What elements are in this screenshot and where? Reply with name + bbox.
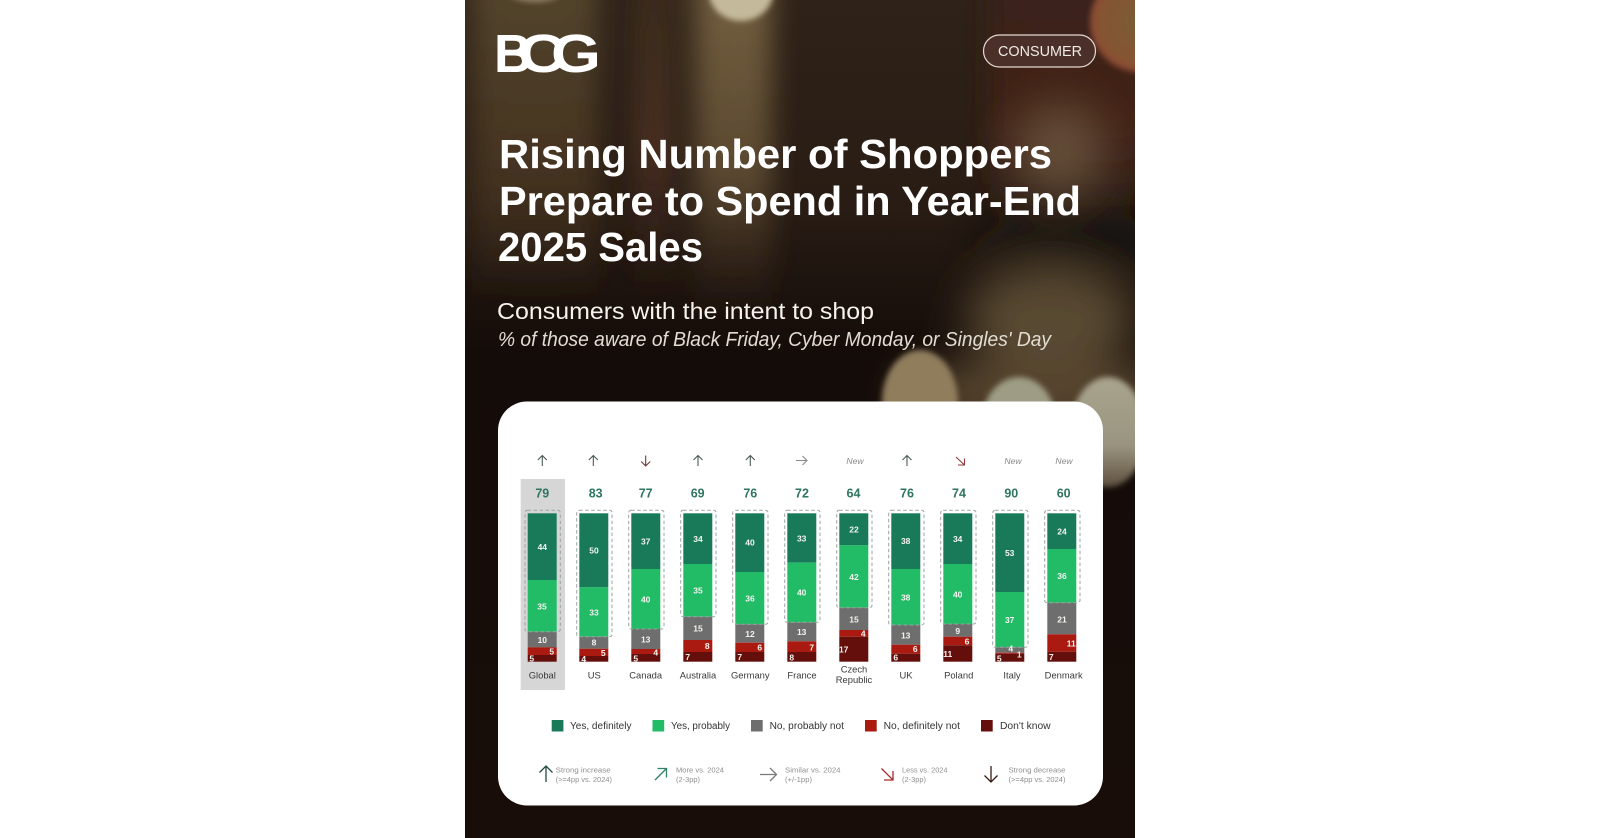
legend: trend arrows: Strong increase <box>556 766 611 774</box>
bar: Denmark <box>1045 510 1080 662</box>
bar: Australia <box>681 510 716 662</box>
subtitle: % of those aware of Black Friday, Cyber Monday, or Singles' Day <box>498 329 1052 351</box>
country labels: Canada <box>629 670 663 681</box>
bar: Denmark: 11 <box>1067 638 1076 648</box>
totals row: 76 <box>900 486 914 500</box>
bar: UK: 13 <box>901 630 911 640</box>
legend: answer colours: Yes, definitely <box>570 721 632 732</box>
bar: US: 50 <box>589 546 599 556</box>
bar: Czech Republic <box>837 510 872 662</box>
country labels: Poland <box>944 670 973 681</box>
totals row: 60 <box>1057 486 1071 500</box>
bar: France: 40 <box>797 588 807 598</box>
bar: France <box>785 510 820 662</box>
trend arrows row <box>538 456 964 466</box>
legend: trend arrows: (>=4pp vs. 2024) <box>556 775 612 784</box>
bar: Canada: 13 <box>641 634 651 644</box>
legend: trend arrows: (2-3pp) <box>676 775 700 784</box>
country labels: France <box>787 670 817 681</box>
highlight: global column <box>521 479 565 690</box>
bar: Czech Republic: 4 <box>861 629 866 639</box>
bar: Canada: 4 <box>653 647 658 657</box>
totals row: 90 <box>1004 486 1018 500</box>
legend: answer colours: No, probably not <box>770 721 844 732</box>
subtitle: Consumers with the intent to shop <box>497 298 874 324</box>
totals row: 76 <box>743 486 757 500</box>
bar: Poland <box>941 510 976 662</box>
legend: answer colours: Don't know <box>1000 721 1051 732</box>
"new" labels: New <box>1004 456 1022 466</box>
legend: trend arrows: More vs. 2024 <box>676 766 724 774</box>
bar: Poland: 9 <box>955 626 960 636</box>
country labels: Germany <box>731 670 770 681</box>
bar: Denmark: 24 <box>1057 526 1067 536</box>
country labels: Australia <box>680 670 717 681</box>
bar: US: 33 <box>589 608 599 618</box>
background photo: blurred bokeh lights <box>465 0 1135 838</box>
country labels: Czech <box>841 663 867 674</box>
legend: trend arrows: Similar vs. 2024 <box>785 766 840 774</box>
bar: Australia: 8 <box>705 641 710 651</box>
bar: Germany: 40 <box>745 538 755 548</box>
panel: chart card <box>498 402 1103 806</box>
legend: answer colours <box>552 720 1051 732</box>
country labels: UK <box>899 670 913 681</box>
logo: BCG <box>494 24 601 84</box>
bar: Czech Republic: 42 <box>849 572 859 582</box>
bar: France: 8 <box>789 652 794 662</box>
legend: trend arrows: (2-3pp) <box>902 775 926 784</box>
title <box>498 131 1081 270</box>
title: Rising Number of Shoppers <box>499 131 1052 177</box>
logo: BCG: B <box>494 24 532 84</box>
bar: Global: 35 <box>537 602 547 612</box>
country labels: Republic <box>836 674 873 685</box>
bar: Czech Republic: 22 <box>849 524 859 534</box>
bar: Global: 44 <box>538 542 547 552</box>
bar: US: 5 <box>601 648 606 658</box>
bar: Italy: 37 <box>1005 615 1015 625</box>
bar: France: 33 <box>797 533 807 543</box>
totals row: 72 <box>795 486 809 500</box>
totals row: 69 <box>691 486 705 500</box>
bar: Czech Republic: 17 <box>839 645 849 655</box>
bar: Global: 5 <box>549 646 554 656</box>
logo: BCG: C <box>518 24 566 84</box>
legend: trend arrows: Less vs. 2024 <box>902 766 948 774</box>
bar: Australia: 15 <box>693 623 703 633</box>
bar: UK: 38 <box>901 592 911 602</box>
bar: Global <box>525 510 560 664</box>
bar: Italy: 53 <box>1005 548 1015 558</box>
title: 2025 Sales <box>498 224 703 270</box>
bar: Germany: 6 <box>757 643 762 653</box>
bar: Australia: 34 <box>693 534 703 544</box>
bar: France: 13 <box>797 627 807 637</box>
legend: trend arrows: (>=4pp vs. 2024) <box>1008 775 1066 784</box>
bar: Germany: 12 <box>745 629 755 639</box>
bar: UK: 6 <box>913 644 918 654</box>
bar: Poland: 40 <box>953 589 963 599</box>
bar: Australia: 35 <box>693 586 703 596</box>
totals row: 74 <box>952 486 966 500</box>
bar: Italy: 1 <box>1017 650 1022 660</box>
country labels: US <box>588 670 601 681</box>
totals row <box>535 486 1071 500</box>
"new" labels <box>846 456 1073 466</box>
"new" labels: New <box>1055 456 1073 466</box>
bar: Australia: 7 <box>685 652 690 662</box>
legend: trend arrows: (+/-1pp) <box>785 775 812 784</box>
totals row: 79 <box>535 486 549 500</box>
bar: France: 7 <box>809 642 814 652</box>
bar: Canada <box>629 510 664 664</box>
bar: Germany: 7 <box>737 652 742 662</box>
bar: Poland: 6 <box>965 636 970 646</box>
totals row: 83 <box>589 486 603 500</box>
country labels: Italy <box>1003 670 1021 681</box>
logo: BCG: G <box>551 24 601 84</box>
bar: Germany <box>733 510 768 662</box>
country labels <box>529 663 1083 685</box>
"new" labels: New <box>846 456 864 466</box>
bar: Canada: 37 <box>641 536 651 546</box>
bar: Czech Republic: 15 <box>849 614 859 624</box>
bar: Italy: 5 <box>997 654 1002 664</box>
bar: Global: 10 <box>538 635 547 645</box>
legend: answer colours: No, definitely not <box>884 721 960 732</box>
bar: Poland: 11 <box>943 649 952 659</box>
bar: US: 8 <box>592 638 597 648</box>
bar: UK: 38 <box>901 536 911 546</box>
subtitle <box>497 298 1052 351</box>
bar: UK <box>889 510 924 663</box>
legend: answer colours: Yes, probably <box>671 721 730 732</box>
bar: Denmark: 7 <box>1049 652 1054 662</box>
totals row: 77 <box>639 486 653 500</box>
bar: Italy <box>993 510 1028 664</box>
title: Prepare to Spend in Year-End <box>499 178 1081 224</box>
bar: US <box>577 510 612 664</box>
legend: trend arrows: Strong decrease <box>1008 766 1066 774</box>
bar: Denmark: 36 <box>1057 571 1067 581</box>
bar: Global: 5 <box>529 654 534 664</box>
bar: Canada: 40 <box>641 594 651 604</box>
legend: trend arrows <box>540 766 1066 784</box>
totals row: 64 <box>847 486 860 500</box>
tag: consumer: CONSUMER <box>998 44 1082 60</box>
country labels: Global <box>529 670 556 681</box>
bar: UK: 6 <box>893 653 898 663</box>
bar: US: 4 <box>581 654 586 664</box>
bar: Denmark: 21 <box>1057 614 1067 624</box>
bar: Canada: 5 <box>633 654 638 664</box>
bar: Poland: 34 <box>953 534 963 544</box>
bar: Germany: 36 <box>745 594 755 604</box>
tag: consumer <box>984 35 1096 67</box>
country labels: Denmark <box>1045 670 1083 681</box>
bar: Italy: 4 <box>1008 643 1013 653</box>
